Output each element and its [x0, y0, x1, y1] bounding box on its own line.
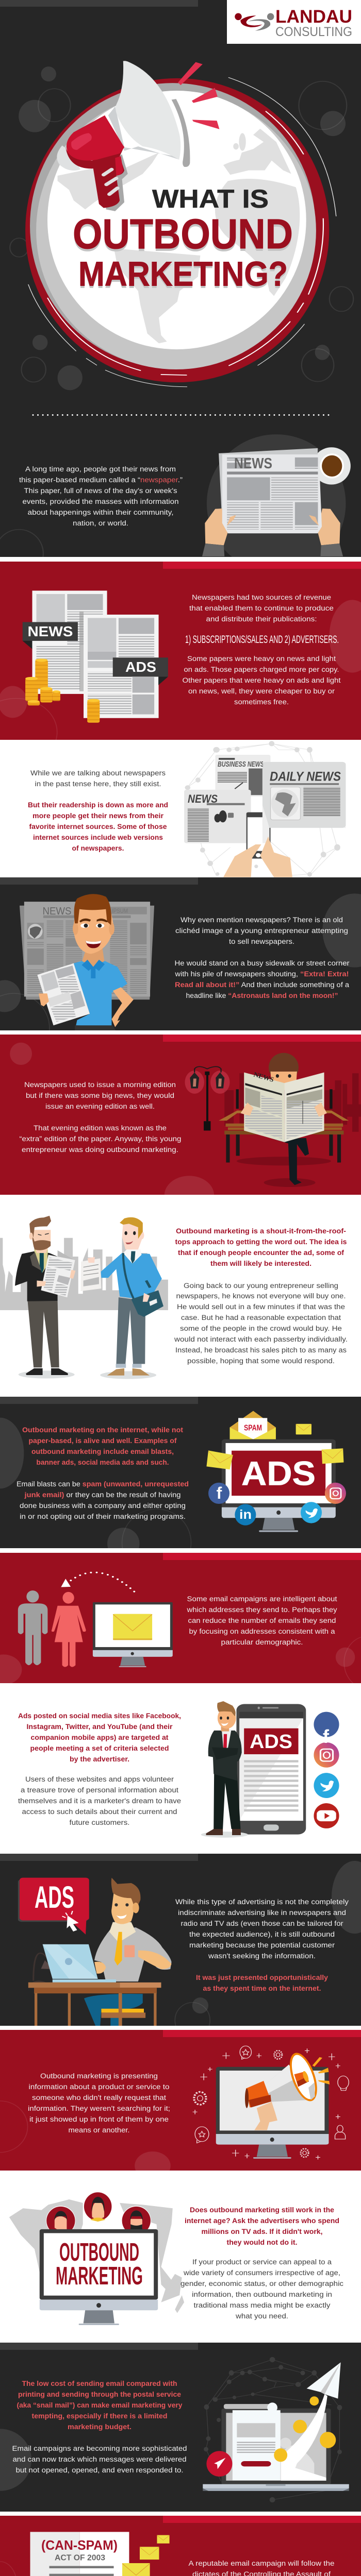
illustration: ads monitor with spam envelopes and social icons: SPAM: [244, 1424, 262, 1432]
text: definition of outbound: means or another.: [68, 2126, 130, 2134]
text: revenue sources: sometimes free.: [234, 698, 289, 706]
text: mass media appeal: traditional mass media might be exactly: [194, 2301, 331, 2309]
text: intro about newspapers: about happenings within their community,: [28, 509, 173, 516]
text: readership is down: favorite internet sources. Some of those: [29, 823, 167, 831]
text: internet outbound marketing examples: paper-based, is alive and well. Examples of: [29, 1437, 177, 1445]
logo: Landau Consulting header: CONSULTING: [275, 25, 352, 39]
text: social media targeting: access to such details about their current and: [22, 1808, 177, 1816]
illustration: smiling man holding newspaper: IPSUM: [112, 907, 128, 914]
text: intro about newspapers: A long time ago, people got their news from: [25, 465, 176, 473]
text: mass media appeal: If your product or service can appeal to a: [192, 2258, 332, 2266]
text: email targeting: Some email campaigns are intelligent about: [187, 1595, 337, 1603]
text: intro about newspapers: nation, or world.: [73, 519, 128, 527]
illustration: man at desk with laptop and ads bubble: [18, 1878, 172, 2026]
illustration: hands holding a newspaper with coffee: NEWS: [234, 455, 272, 472]
text: email cost and tracking: and can now track which messages were delivered: [12, 2455, 187, 2463]
panel: shout it from the rooftops: [0, 1216, 348, 1379]
text: mass media appeal: information, then outbound marketing in: [192, 2291, 332, 2298]
text: still outbound marketing: indiscriminate advertising like in newspapers and: [178, 1909, 346, 1917]
illustration: ads monitor with spam envelopes and social icons: f: [217, 1484, 222, 1502]
panel: young entrepreneur: [0, 877, 361, 1030]
text: mass media appeal: gender, economic status, or other demographic: [180, 2280, 343, 2287]
illustration: outbound marketing monitor over world map: MARKETING: [56, 2262, 143, 2290]
illustration: outbound marketing monitor over world map: [9, 2192, 184, 2325]
text: still outbound marketing: wasn't seeking the information.: [208, 1952, 316, 1960]
text: mass media appeal: internet age? Ask the advertisers who spend: [185, 2217, 339, 2225]
illustration: smiling man holding newspaper: NEWS: [42, 906, 71, 917]
text: email targeting: which addresses they send to. Perhaps they: [186, 1606, 337, 1614]
text: revenue sources: Other papers that were heavy on ads and light: [183, 676, 341, 684]
panel: not indiscriminate: [0, 1854, 361, 2038]
text: internet outbound marketing examples: Outbound marketing on the internet, while not: [22, 1426, 184, 1434]
text: definition of outbound: it just showed up in front of them by one: [29, 2115, 169, 2123]
illustration: demographic people and email monitor: [18, 1572, 173, 1667]
illustration: man reading newspaper on a bench: [185, 1053, 361, 1187]
text: email cost and tracking: Email campaigns are becoming more sophisticated: [12, 2445, 187, 2452]
text: social media targeting: Instagram, Twitter, and YouTube (and their: [27, 1723, 173, 1731]
text: intro about newspapers: This paper, full of news of the day's or week's: [24, 487, 177, 495]
text: mass media appeal: wide variety of consumers irrespective of age,: [183, 2269, 340, 2277]
text: email cost and tracking: The low cost of sending email compared with: [22, 2380, 177, 2387]
text: outbound marketing definition: Outbound marketing is a shout-it-from-the-roof-: [176, 1227, 346, 1235]
text: still outbound marketing: as they spent time on the internet.: [203, 1985, 321, 1992]
title: [74, 190, 292, 289]
text: readership is down: [28, 769, 168, 852]
panel: social media ads: [18, 1701, 339, 1838]
illustration: man reading newspaper on a bench: NEWS: [253, 1070, 275, 1083]
text: internet outbound marketing examples: Email blasts can be spam (unwanted, unrequested: [17, 1480, 189, 1488]
panel: extra edition: [0, 1035, 361, 1195]
illustration: businessman beside phone with ads: [201, 1701, 339, 1838]
text: readership is down: in the past tense here, they still exist.: [35, 780, 161, 788]
illustration: online news on a phone: [184, 741, 346, 877]
text: outbound marketing definition: would not interact with each passerby individually.: [174, 1335, 348, 1343]
illustration: laptop launching paper plane: [203, 2357, 349, 2502]
text: social media targeting: by the advertiser.: [70, 1755, 129, 1763]
text: social media targeting: people meeting a set of criteria selected: [30, 1744, 169, 1752]
title: MARKETING?: [78, 257, 288, 296]
text: intro about newspapers: [19, 465, 183, 527]
text: morning and extra editions: entrepreneur was doing outbound marketing.: [22, 1146, 178, 1154]
text: revenue sources: Newspapers had two sources of revenue: [192, 594, 331, 601]
text: social media targeting: themselves and it is a marketer's dream to have: [18, 1797, 181, 1805]
panel: newspapers still exist: [28, 741, 346, 877]
text: morning and extra editions: That evening edition was known as the: [34, 1124, 167, 1132]
text: mass media appeal: they would not do it.: [227, 2239, 297, 2246]
text: outbound marketing definition: Instead, he broadcast his sales pitch to as many as: [175, 1346, 347, 1354]
illustration: man at desk with laptop and ads bubble: ADS: [35, 1880, 74, 1914]
text: email targeting: particular demographic.: [221, 1638, 303, 1646]
panel: targeted email campaigns: [0, 1553, 361, 1688]
text: readership is down: While we are talking about newspapers: [30, 769, 166, 777]
illustration: hands holding a newspaper with coffee: [202, 434, 351, 557]
illustration: online news on a phone: DAILY NEWS: [270, 770, 341, 784]
text: still outbound marketing: radio and TV ads (even those can be tailored for: [180, 1920, 343, 1927]
text: social media targeting: companion mobile apps) are targeted at: [31, 1734, 169, 1741]
text: why mention newspapers: He would stand on a busy sidewalk or street corner: [174, 959, 350, 967]
text: social media targeting: future customers.: [69, 1819, 130, 1826]
text: readership is down: But their readership is down as more and: [28, 801, 168, 809]
panel: does it still work: [9, 2192, 343, 2325]
text: internet outbound marketing examples: done business with a company and either opting: [20, 1502, 186, 1510]
text: definition of outbound: [28, 2072, 170, 2134]
illustration: ads monitor with spam envelopes and social icons: [206, 1411, 346, 1532]
illustration: smiling man holding newspaper: [20, 894, 154, 1031]
text: outbound marketing definition: them will likely be interested.: [210, 1260, 311, 1267]
text: internet outbound marketing examples: [17, 1426, 189, 1520]
text: mass media appeal: what you need.: [235, 2312, 288, 2320]
text: why mention newspapers: Why even mention newspapers? There is an old: [180, 916, 343, 924]
text: email cost and tracking: but not opened, opened, and even responded to.: [15, 2466, 184, 2474]
text: definition of outbound: information about a product or service to: [29, 2083, 169, 2091]
text: revenue sources: that enabled them to continue to produce: [189, 604, 334, 612]
illustration: businessman beside phone with ads: f: [323, 1726, 330, 1747]
text: revenue sources: and distribute their publications:: [206, 615, 317, 623]
text: definition of outbound: Outbound marketing is presenting: [40, 2072, 158, 2080]
title: OUTBOUND: [73, 211, 293, 258]
text: mass media appeal: Does outbound marketing still work in the: [190, 2206, 334, 2214]
text: email targeting: [186, 1595, 337, 1646]
text: morning and extra editions: “extra” edition of the paper. Anyway, this young: [20, 1135, 182, 1143]
panel: outbound marketing on the internet: [0, 1397, 361, 1548]
text: social media targeting: Ads posted on social media sites like Facebook,: [18, 1712, 181, 1720]
title: MARKETING?: [78, 255, 288, 294]
text: revenue sources: on ads. Those papers charged more per copy.: [184, 666, 339, 673]
text: email cost and tracking: printing and sending through the postal service: [18, 2391, 182, 2398]
text: readership is down: more people get their news from their: [32, 812, 164, 820]
illustration: online news on a phone: BUSINESS NEWS: [218, 760, 264, 769]
text: email cost and tracking: [12, 2380, 187, 2474]
panel: presenting information: [0, 2030, 361, 2180]
text: mass media appeal: [180, 2206, 343, 2320]
text: social media targeting: [18, 1712, 181, 1826]
text: why mention newspapers: to sell newspapers.: [229, 938, 294, 945]
text: still outbound marketing: the expected audience), it is still outbound: [189, 1930, 335, 1938]
text: outbound marketing definition: case. But he had a reasonable expectation that: [181, 1314, 341, 1321]
panel: hero: [0, 0, 361, 578]
text: internet outbound marketing examples: junk email) or they can be the result of having: [24, 1491, 180, 1499]
text: morning and extra editions: Newspapers used to issue a morning edition: [24, 1081, 176, 1089]
text: why mention newspapers: headline like “Astronauts land on the moon!”: [186, 992, 338, 999]
text: definition of outbound: someone who didn't really request that: [32, 2094, 166, 2102]
text: outbound marketing definition: Going back to our young entrepreneur selling: [184, 1282, 338, 1290]
illustration: megaphone bursting from monitor: [193, 2046, 349, 2160]
text: can-spam compliance: A reputable email campaign will follow the: [189, 2560, 334, 2567]
illustration: can-spam document and gavel: [30, 2532, 178, 2576]
text: email targeting: can reduce the number of emails they send: [188, 1617, 336, 1624]
text: email targeting: by focusing on addresses consistent with a: [189, 1628, 335, 1635]
text: can-spam compliance: [189, 2561, 334, 2576]
illustration: news and ads pages with coins: [23, 590, 168, 723]
text: readership is down: internet sources include web versions: [33, 834, 163, 841]
illustration: outbound marketing monitor over world map: OUTBOUND: [59, 2239, 139, 2266]
text: email cost and tracking: marketing budget.: [68, 2423, 132, 2431]
text: intro about newspapers: this paper-based medium called a “ newspaper .”: [19, 476, 183, 484]
text: morning and extra editions: [20, 1081, 182, 1154]
text: why mention newspapers: [174, 916, 350, 999]
panel: two sources of revenue: [0, 562, 361, 740]
illustration: ads monitor with spam envelopes and social icons: in: [239, 1507, 252, 1522]
title: WHAT IS: [152, 184, 269, 213]
text: internet outbound marketing examples: outbound marketing include email blasts,: [31, 1448, 174, 1455]
text: definition of outbound: information. They weren't searching for it;: [28, 2105, 170, 2112]
text: internet outbound marketing examples: in or not opting out of their marketing programs.: [20, 1513, 186, 1520]
text: why mention newspapers: Read all about it!” And then include something of a: [175, 981, 350, 989]
panel: low cost of email: [0, 2343, 361, 2512]
logo: Landau Consulting header: [227, 0, 361, 44]
text: still outbound marketing: [175, 1898, 349, 1992]
text: outbound marketing definition: newspapers, he knows not everyone will buy one.: [176, 1292, 346, 1300]
text: still outbound marketing: It was just presented opportunistically: [196, 1974, 329, 1981]
illustration: news and ads pages with coins: ADS: [125, 659, 156, 675]
illustration: can-spam document and gavel: (CAN-SPAM): [41, 2537, 118, 2553]
text: revenue sources: on news, well, they were cheaper to buy or: [188, 687, 335, 695]
text: revenue sources: [183, 594, 341, 706]
illustration: businessman beside phone with ads: ADS: [250, 1731, 292, 1753]
text: morning and extra editions: but if there was some big news, they would: [26, 1092, 174, 1099]
text: email cost and tracking: tempting, especially if there is a limited: [32, 2412, 167, 2420]
text: outbound marketing definition: that if enough people encounter the ad, some of: [178, 1249, 344, 1257]
illustration: ads monitor with spam envelopes and social icons: ADS: [241, 1454, 316, 1492]
text: social media targeting: a treasure trove of personal information about: [21, 1786, 178, 1794]
illustration: two businessmen with city skyline: [0, 1216, 168, 1379]
text: still outbound marketing: marketing because the potential customer: [189, 1941, 335, 1949]
text: mass media appeal: millions on TV ads. If it didn't work,: [201, 2228, 323, 2235]
illustration: news and ads pages with coins: NEWS: [28, 623, 73, 639]
text: outbound marketing definition: some of the people in the crowd would buy. He: [180, 1325, 342, 1332]
text: social media targeting: Users of these websites and apps volunteer: [25, 1775, 174, 1783]
text: still outbound marketing: While this type of advertising is not the completely: [175, 1898, 349, 1906]
text: outbound marketing definition: [174, 1227, 348, 1365]
text: outbound marketing definition: He would sell out in a few minutes if that was the: [177, 1303, 345, 1311]
illustration: globe badge with megaphone: [25, 61, 336, 387]
title: OUTBOUND: [73, 213, 293, 260]
text: why mention newspapers: clichéd image of a young entrepreneur attempting: [175, 927, 348, 935]
illustration: online news on a phone: NEWS: [188, 792, 218, 805]
text: readership is down: of newspapers.: [72, 844, 124, 852]
text: morning and extra editions: issue an evening edition as well.: [45, 1103, 155, 1110]
logo: Landau Consulting header: LANDAU: [275, 7, 352, 27]
panel: can-spam act: [0, 2516, 361, 2576]
text: why mention newspapers: with his pile of newspapers shouting, “Extra! Extra!: [174, 970, 349, 978]
text: email cost and tracking: (aka “snail mail”) can make email marketing very: [17, 2401, 183, 2409]
illustration: can-spam document and gavel: ACT OF 2003: [55, 2553, 105, 2563]
text: revenue sources: Some papers were heavy on news and light: [187, 655, 336, 663]
text: outbound marketing definition: possible, hoping that some would respond.: [187, 1357, 335, 1365]
text: intro about newspapers: events, provided the masses with information: [23, 498, 178, 505]
text: outbound marketing definition: tops approach to getting the word out. The idea is: [175, 1238, 347, 1246]
text: internet outbound marketing examples: banner ads, social media ads and such.: [36, 1459, 169, 1466]
